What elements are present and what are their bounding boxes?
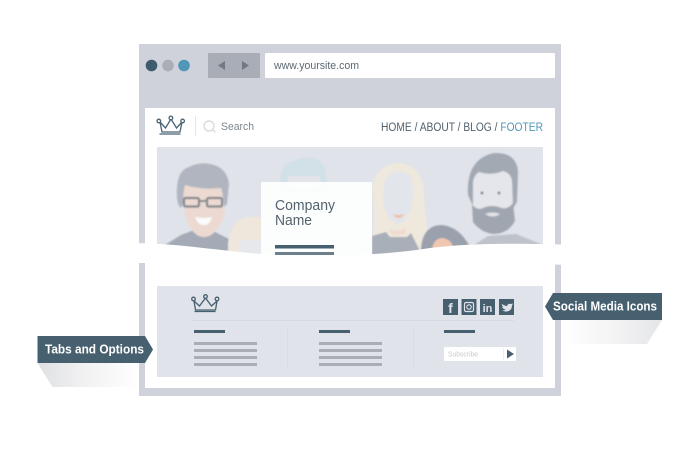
person: child left [228,217,262,260]
person: man with blue hair [281,158,326,192]
person: bearded man [466,153,543,260]
callout: social media icons [545,293,662,344]
icon: search [204,121,216,132]
icon: linkedin: in [483,303,493,315]
callout: social media icons: Social Media Icons [553,300,657,314]
callout: tabs and options [38,336,153,387]
callout: tabs and options: Tabs and Options [45,342,144,356]
search label: Search [221,121,254,133]
navigation buttons [208,53,260,78]
icon: facebook: f [448,300,453,316]
company name card: Name [275,212,312,229]
social media icons [443,299,514,316]
icon: instagram [462,299,476,315]
company name card [261,182,372,260]
tab column 2 [319,330,382,366]
hero banner [157,147,543,261]
browser controls [146,53,555,78]
icon: footer crown logo [192,295,219,312]
subscribe input: Subscribe [448,352,478,358]
icon: crown logo [157,116,184,134]
icon: twitter [499,299,514,315]
tab column 1 [194,330,257,366]
company name card: Company [275,197,335,214]
window dots [146,60,190,71]
person: man with glasses [157,163,229,260]
torn page break [125,243,575,270]
subscribe column [444,330,516,361]
person: blonde woman [372,163,430,261]
browser window frame [139,44,561,396]
footer panel [157,286,543,377]
site header [157,116,543,136]
address bar [265,53,555,78]
address bar: www.yoursite.com [273,60,359,72]
person: child right [421,225,469,260]
navigation menu: HOME / ABOUT / BLOG / FOOTER [381,122,543,134]
